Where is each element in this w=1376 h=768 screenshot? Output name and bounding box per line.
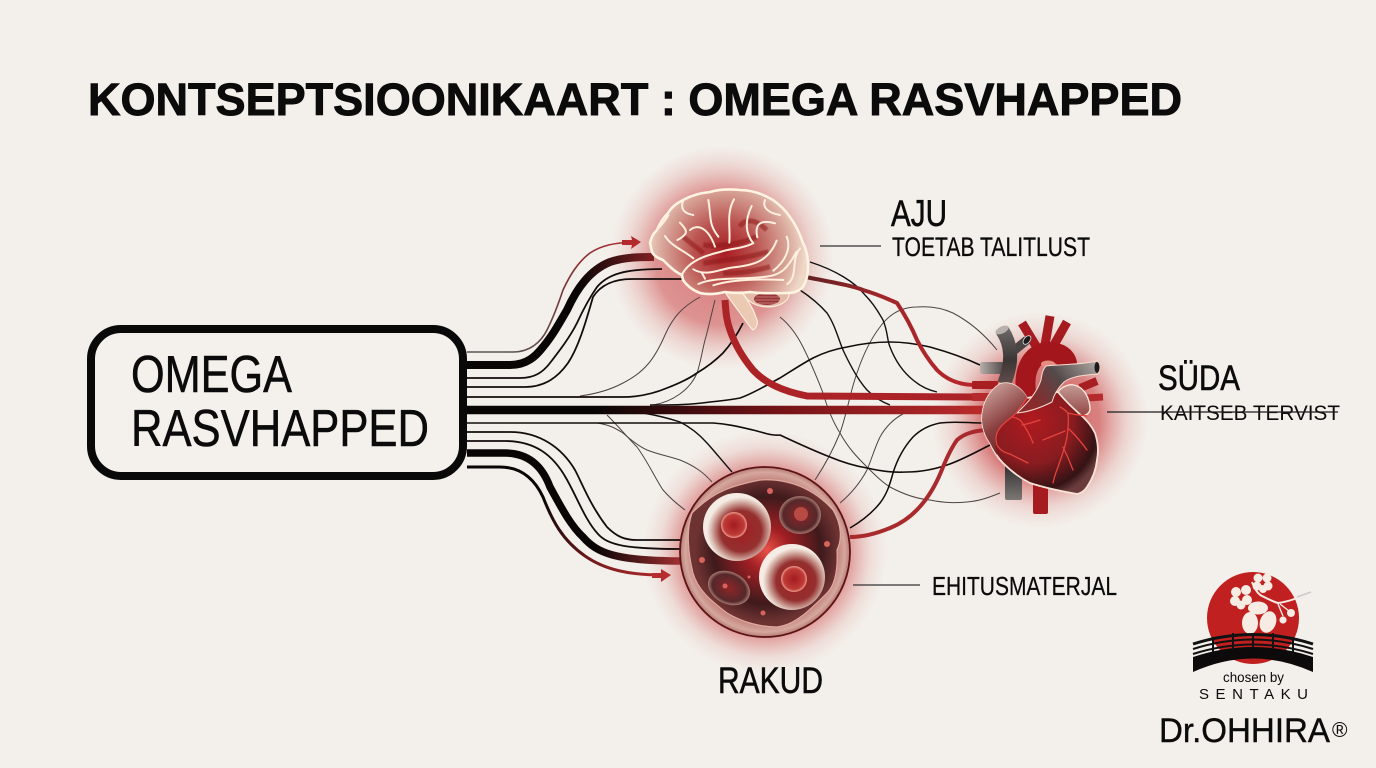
gyri — [657, 199, 800, 285]
logo: Dr.OHHIRA: SENTAKU — [1199, 686, 1308, 703]
right stubs — [1080, 381, 1097, 388]
top branch thin 2 — [467, 269, 662, 378]
arrow: to brain — [622, 236, 641, 249]
left chamber — [982, 383, 1027, 455]
cell: small bottom — [702, 564, 756, 612]
right atrium — [1058, 385, 1090, 416]
red: brain down to heart — [725, 300, 975, 397]
logo text: chosen by — [1223, 669, 1284, 685]
red: brain to heart — [806, 277, 975, 385]
top branch thick — [467, 257, 654, 365]
box text: RASVHAPPED — [131, 400, 429, 458]
logo: Dr.OHHIRA: Dr.OHHIRA — [1159, 712, 1330, 750]
upper branches — [1022, 316, 1067, 346]
logo: Dr.OHHIRA — [1159, 572, 1348, 750]
label: heart: SÜDA — [1158, 359, 1241, 398]
cerebellum — [743, 292, 789, 307]
connector network — [467, 242, 1000, 575]
panel: omega box — [91, 329, 463, 476]
top branch thin 3 — [467, 279, 682, 387]
top branch thin with arrow — [467, 242, 632, 352]
icon: cells — [680, 467, 850, 637]
cell: large right — [759, 544, 825, 610]
glow: heart — [932, 312, 1148, 528]
pulmonary artery — [1017, 361, 1099, 413]
line 397: to brain stem — [467, 323, 743, 397]
line 423: curves to heart — [467, 423, 990, 472]
label: heart: KAITSEB TERVIST — [1160, 402, 1340, 425]
descending vessels — [1005, 462, 1022, 500]
cell: large left — [703, 493, 771, 561]
brain stem — [725, 292, 757, 330]
logo sun — [1207, 572, 1299, 664]
label: cell function: EHITUSMATERJAL — [932, 571, 1117, 601]
thin cross-links — [580, 262, 1000, 510]
bottom branch thick — [467, 453, 682, 561]
logo: Dr.OHHIRA: ® — [1332, 719, 1348, 742]
box text — [131, 346, 429, 458]
bottom branch thin 1 — [467, 432, 682, 540]
main thick horizontal — [467, 406, 985, 414]
box text: OMEGA — [131, 346, 292, 404]
bottom branch thin 2 — [467, 441, 682, 549]
label: heart — [1107, 359, 1340, 425]
heart body — [982, 383, 1098, 494]
cell to heart black line — [850, 422, 982, 528]
bottom branch arrow line — [467, 467, 662, 575]
cerebrum — [650, 189, 808, 294]
icon: brain — [650, 189, 808, 330]
label: brain: TOETAB TALITLUST — [892, 232, 1090, 262]
logo blossoms — [1230, 574, 1311, 635]
cell: small top — [779, 496, 821, 534]
arrow: to cells — [652, 569, 671, 582]
red: cell to heart — [850, 430, 985, 537]
label: cells: RAKUD — [718, 660, 823, 701]
inner membrane — [688, 480, 840, 627]
coronary veins — [996, 398, 1087, 483]
glow: brain — [610, 146, 834, 370]
glow: cells — [643, 430, 887, 674]
label: brain — [820, 193, 1090, 262]
left stubs — [980, 362, 1004, 374]
icon: heart — [972, 316, 1103, 514]
upper arc to heart — [650, 342, 980, 405]
grey vessels — [1011, 340, 1027, 353]
logo bridge — [1193, 633, 1313, 672]
organelles — [699, 488, 830, 616]
aortic arch — [1026, 352, 1067, 398]
label: brain: AJU — [891, 193, 947, 234]
title: KONTSEPTSIOONIKAART : OMEGA RASVHAPPED — [88, 74, 1182, 125]
